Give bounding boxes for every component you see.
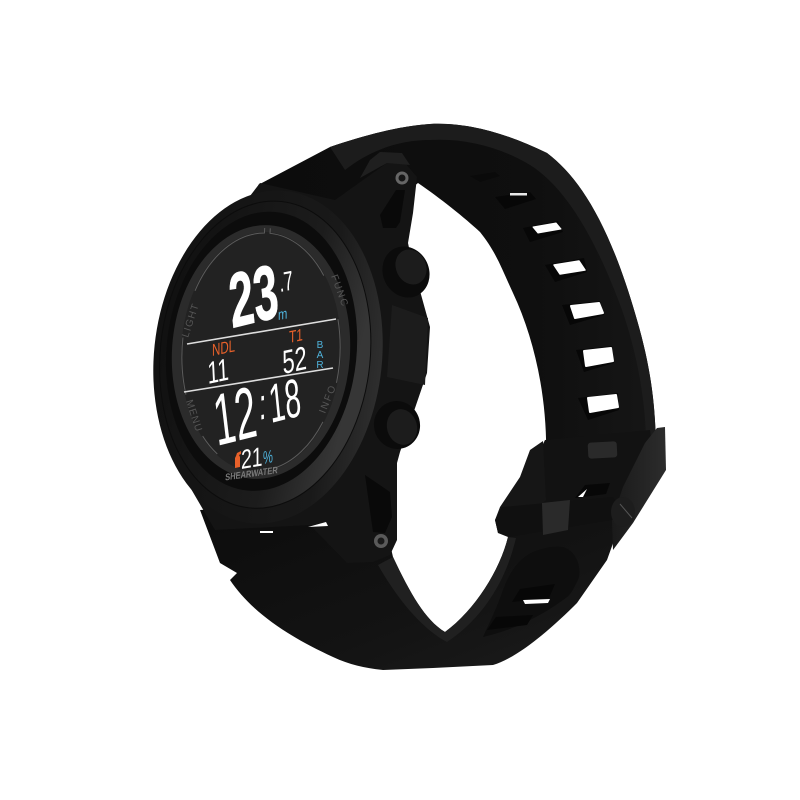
watch — [137, 124, 666, 670]
buckle — [495, 427, 666, 550]
T1 label: T1 — [289, 326, 303, 348]
label INFO: INFO — [318, 383, 339, 415]
bezel — [137, 179, 399, 535]
brand: SHEARWATER — [225, 465, 278, 484]
BAR unit: B — [317, 340, 324, 351]
top lug recess — [380, 190, 405, 228]
divider lines — [184, 319, 336, 392]
BAR unit: A — [317, 350, 324, 361]
watch case — [170, 152, 438, 563]
strap outer lip — [330, 124, 656, 445]
case side panel — [387, 305, 428, 385]
T1 value: 52 — [281, 338, 308, 381]
label MENU: MENU — [183, 399, 204, 434]
bottom lug recess — [365, 475, 392, 533]
NDL label: NDL — [212, 337, 235, 361]
label LIGHT: LIGHT — [180, 302, 202, 339]
depth reading: 23 — [225, 248, 282, 345]
BAR unit — [316, 340, 324, 371]
NDL value: 11 — [207, 351, 230, 391]
time reading — [209, 368, 303, 462]
button: lower — [369, 396, 425, 454]
screen — [163, 219, 359, 485]
screw: top lug — [396, 172, 408, 184]
label FUNC: FUNC — [328, 273, 350, 309]
time reading: 12 — [209, 371, 261, 462]
button: upper — [374, 239, 438, 305]
oxygen reading: % — [263, 447, 273, 469]
strap inner lip — [378, 537, 516, 642]
BAR unit: R — [316, 360, 324, 371]
lower strap — [200, 500, 625, 670]
screw: bottom lug — [374, 534, 388, 548]
depth reading: .7 — [277, 264, 295, 298]
strap gap slivers — [308, 522, 328, 527]
oxygen reading — [241, 443, 273, 476]
strap slots — [470, 172, 619, 420]
time reading: : — [259, 379, 266, 430]
icon: orange tank — [235, 451, 241, 468]
bezel guide ring — [176, 224, 346, 471]
depth reading: m — [278, 305, 287, 323]
strap keeper recess — [483, 547, 579, 637]
upper strap — [258, 124, 656, 470]
time reading: 18 — [266, 368, 303, 435]
top lug notch — [360, 152, 410, 178]
upper strap end near buckle — [510, 430, 655, 520]
oxygen reading: 21 — [241, 443, 263, 476]
